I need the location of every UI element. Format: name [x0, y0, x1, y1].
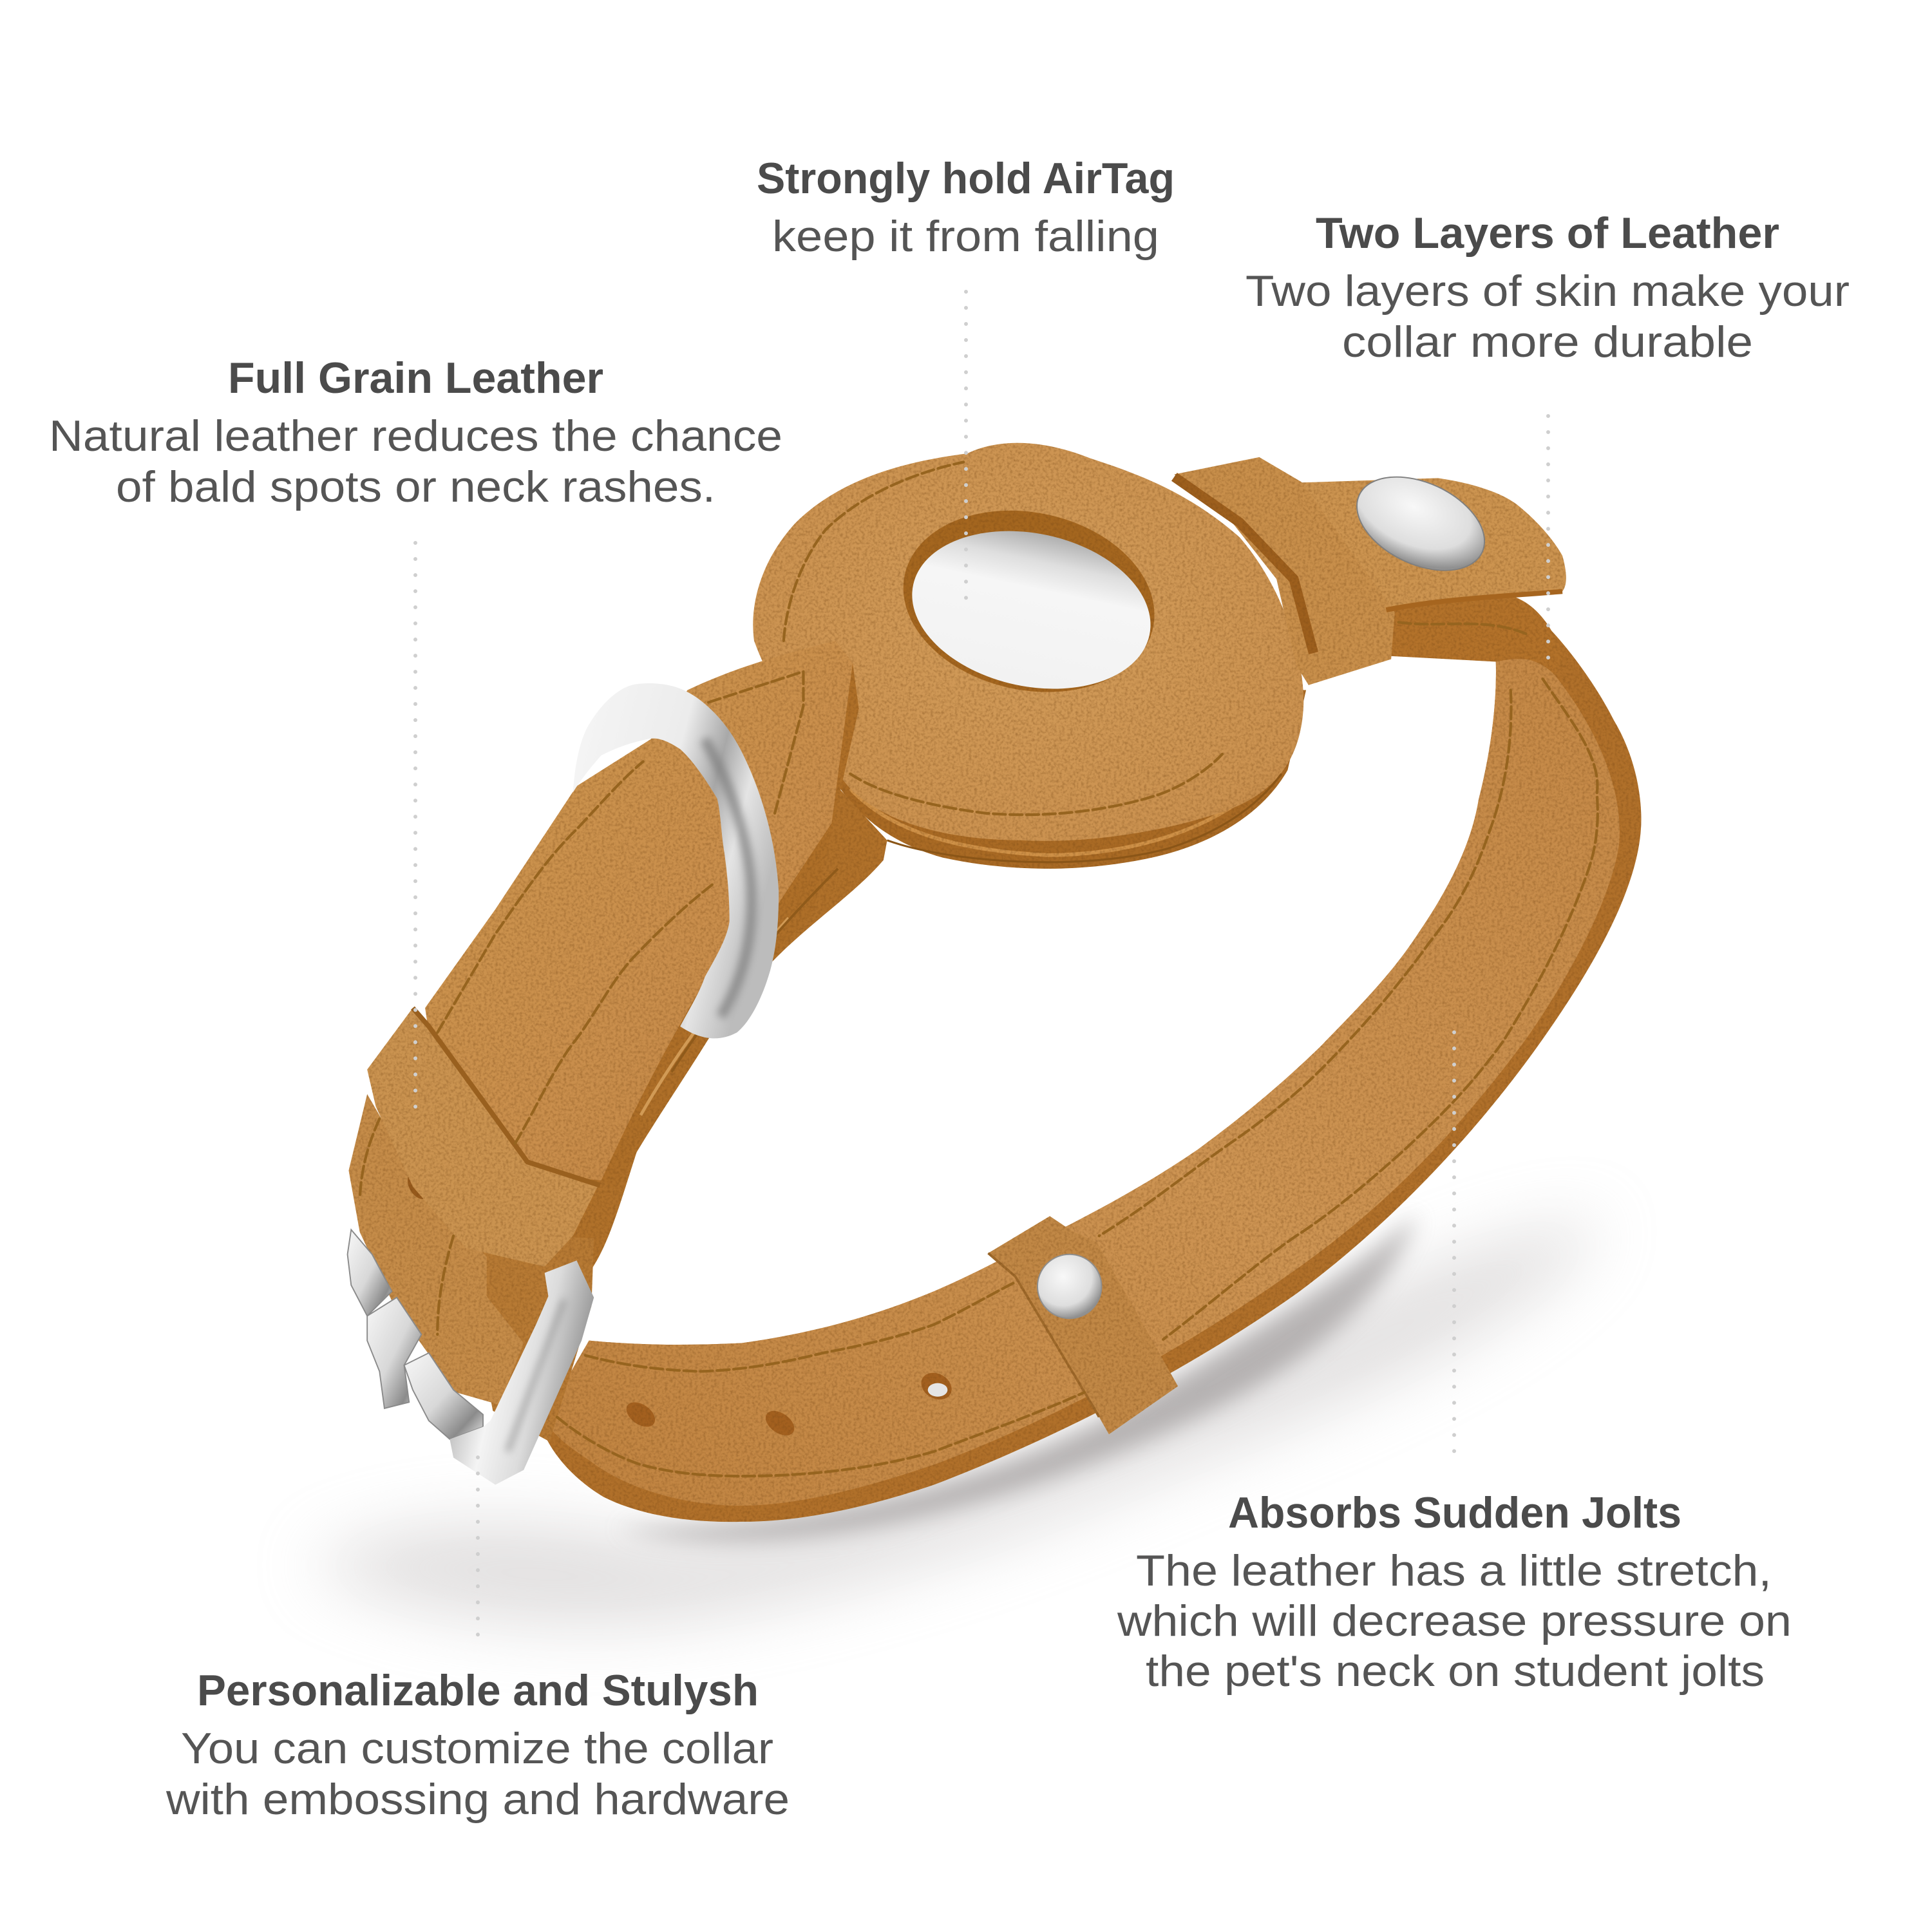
strap holes [622, 1367, 956, 1441]
callout: Two Layers of Leather [1245, 209, 1850, 366]
AirTag window rim [886, 488, 1171, 714]
small snap button [1037, 1255, 1101, 1318]
callout: Absorbs Sudden Jolts: which will decrease pressure on [1117, 1596, 1792, 1645]
leader line: Personalizable and Stulysh [476, 1457, 480, 1640]
strap: outer edge [542, 600, 1642, 1522]
back strap section behind tip [1380, 596, 1562, 675]
callout: Two Layers of Leather: Two Layers of Leather [1316, 209, 1779, 258]
top keeper band [1174, 457, 1395, 685]
AirTag holder stitching [784, 462, 1222, 815]
strap end stitching [360, 1119, 453, 1334]
callout: Full Grain Leather: of bald spots or neck rashes. [116, 462, 715, 511]
leader line: Strongly hold AirTag [964, 292, 968, 600]
leader line: Full Grain Leather [413, 543, 417, 1109]
callout: Two Layers of Leather: Two layers of skin make your [1245, 267, 1850, 316]
collar illustration [308, 443, 1642, 1627]
D-ring [573, 683, 779, 1038]
AirTag holder: top face [753, 443, 1303, 841]
strap end hole [403, 1168, 435, 1203]
front strap edge [601, 663, 859, 1189]
buckle frame [450, 1260, 594, 1485]
callout: Strongly hold AirTag [757, 154, 1175, 261]
top snap button [1342, 458, 1499, 589]
leather inside buckle [459, 1232, 594, 1442]
leather detail lines [413, 591, 1562, 1186]
buckle prongs [348, 1229, 483, 1439]
AirTag window [897, 510, 1166, 710]
callout: Personalizable and Stulysh: Personalizable and Stulysh [197, 1666, 759, 1715]
strap: top face [545, 659, 1620, 1506]
callout: Full Grain Leather: Natural leather reduces the chance [49, 412, 782, 460]
callout: Strongly hold AirTag: keep it from falling [772, 212, 1159, 261]
front strap under layer [542, 774, 887, 1273]
front strap stitching [437, 672, 803, 1144]
leader line: Two Layers of Leather [1546, 416, 1550, 660]
leader line: Absorbs Sudden Jolts [1452, 1032, 1456, 1452]
AirTag holder: layered edge [828, 690, 1306, 869]
cast shadow [308, 1214, 1602, 1627]
callout: Full Grain Leather: Full Grain Leather [228, 354, 603, 402]
callout: Two Layers of Leather: collar more durable [1342, 317, 1753, 366]
small keeper loop [988, 1216, 1178, 1434]
strap tip [1287, 478, 1566, 610]
buckle keeper band [367, 1008, 598, 1267]
callout: Personalizable and Stulysh: You can customize the collar [181, 1724, 773, 1773]
callout: Strongly hold AirTag: Strongly hold AirTag [757, 154, 1175, 203]
callout: Personalizable and Stulysh [166, 1666, 790, 1824]
strap stitching [557, 622, 1598, 1476]
strap hole opening [928, 1383, 947, 1397]
leather parts [348, 443, 1642, 1522]
callout: Absorbs Sudden Jolts: Absorbs Sudden Jolts [1228, 1488, 1681, 1537]
front strap [425, 641, 857, 1180]
callout: Absorbs Sudden Jolts [1117, 1488, 1792, 1696]
callout: Full Grain Leather [49, 354, 782, 511]
callout: Absorbs Sudden Jolts: the pet's neck on student jolts [1146, 1647, 1765, 1696]
strap end [348, 1094, 524, 1405]
callout: Absorbs Sudden Jolts: The leather has a little stretch, [1136, 1546, 1772, 1595]
callout: Personalizable and Stulysh: with embossing and hardware [166, 1775, 790, 1824]
